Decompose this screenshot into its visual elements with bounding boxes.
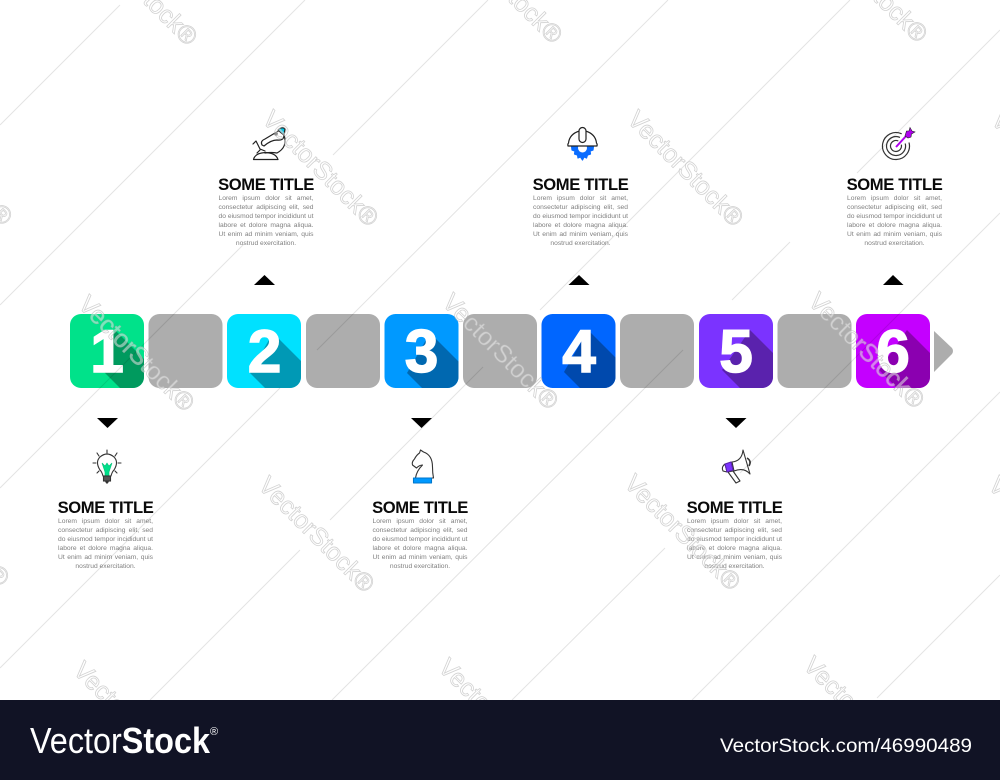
heading: SOME TITLE	[687, 498, 782, 516]
text block: nostrud exercitation.	[864, 240, 925, 247]
text block: Lorem ipsum dolor sit amet,	[218, 194, 314, 202]
text block: do eiusmod tempor incididunt ut	[218, 213, 314, 220]
text block: do eiusmod tempor incididunt ut	[372, 536, 468, 543]
text block: Ut enim ad minim veniam, quis	[847, 231, 942, 238]
text block: do eiusmod tempor incididunt ut	[58, 536, 153, 543]
text block: Lorem ipsum dolor sit amet,	[58, 518, 153, 524]
step 6	[856, 314, 930, 388]
text block: nostrud exercitation.	[390, 563, 450, 570]
watermark stamps: VectorStock®	[257, 105, 384, 233]
step 3: 3	[405, 318, 438, 385]
footer logo: VectorStock	[30, 720, 211, 761]
heading: SOME TITLE	[372, 498, 468, 516]
text block	[58, 518, 153, 570]
step 1: 1	[90, 318, 124, 385]
watermark stamps: VectorStock®	[73, 290, 200, 418]
footer id: VectorStock.com/46990489	[720, 736, 972, 757]
text block: nostrud exercitation.	[550, 240, 611, 247]
watermark stamps: VectorStock®	[619, 469, 746, 597]
text block	[847, 194, 942, 247]
timeline	[70, 314, 953, 388]
step 4	[542, 314, 616, 388]
step 2	[227, 314, 301, 388]
panel: step 1	[58, 450, 154, 570]
watermark stamps: VectorStock®	[253, 471, 380, 599]
text block: nostrud exercitation.	[236, 240, 296, 247]
panel: step 5	[687, 450, 782, 570]
step 5	[699, 314, 773, 388]
pointer arrows	[97, 275, 904, 428]
text block: Ut enim ad minim veniam, quis	[58, 554, 153, 561]
text block	[218, 194, 314, 247]
text block: labore et dolore magna aliqua.	[372, 545, 468, 552]
panel: step 3	[372, 449, 468, 570]
watermark stamps: VectorStock®	[622, 105, 749, 233]
text block: labore et dolore magna aliqua.	[533, 222, 628, 229]
text block: do eiusmod tempor incididunt ut	[687, 536, 782, 543]
text block: labore et dolore magna aliqua.	[58, 545, 153, 552]
panel: step 6	[847, 126, 942, 247]
text block: do eiusmod tempor incididunt ut	[533, 213, 628, 220]
text block: Ut enim ad minim veniam, quis	[533, 231, 628, 238]
heading: SOME TITLE	[847, 174, 942, 194]
text block: consectetur adipiscing elit, sed	[533, 204, 628, 211]
heading: SOME TITLE	[218, 174, 314, 194]
text block: nostrud exercitation.	[75, 563, 136, 570]
icon: megaphone	[722, 450, 751, 484]
text block: labore et dolore magna aliqua.	[218, 222, 314, 229]
text block: labore et dolore magna aliqua.	[847, 222, 942, 229]
icon: target and dart	[882, 126, 916, 160]
step 4: 4	[562, 318, 596, 385]
registered mark: ®	[210, 726, 218, 738]
text block: Lorem ipsum dolor sit amet,	[372, 518, 468, 524]
text block: consectetur adipiscing elit, sed	[847, 204, 942, 211]
step 2: 2	[248, 318, 281, 385]
text block: consectetur adipiscing elit, sed	[218, 204, 314, 211]
text block: Lorem ipsum dolor sit amet,	[847, 194, 942, 202]
text block: Ut enim ad minim veniam, quis	[372, 554, 468, 561]
text block: Lorem ipsum dolor sit amet,	[687, 518, 782, 524]
icon: helmet and gear	[567, 126, 598, 161]
watermark stamps: VectorStock®	[437, 288, 564, 416]
text block: do eiusmod tempor incididunt ut	[847, 213, 942, 220]
text block: Lorem ipsum dolor sit amet,	[533, 194, 628, 202]
connector blocks	[148, 314, 852, 388]
watermark stamps: VectorStock®	[803, 287, 930, 415]
panel: step 2	[218, 127, 314, 247]
heading: SOME TITLE	[58, 498, 153, 516]
text block: consectetur adipiscing elit, sed	[372, 527, 468, 534]
step 1	[70, 314, 144, 388]
step 3	[384, 314, 458, 388]
text block	[372, 518, 468, 570]
text block: labore et dolore magna aliqua.	[687, 545, 782, 552]
panel: step 4	[533, 126, 628, 247]
footer bar	[0, 700, 1000, 780]
end arrow	[934, 331, 953, 372]
text block	[687, 518, 782, 570]
icon: chess knight	[412, 449, 434, 484]
icon: microscope	[252, 127, 286, 160]
step 5: 5	[719, 318, 753, 385]
text block: Ut enim ad minim veniam, quis	[218, 231, 314, 238]
text block: Ut enim ad minim veniam, quis	[687, 554, 782, 561]
icon: light bulb	[92, 450, 122, 484]
step 6: 6	[876, 318, 910, 385]
text block: consectetur adipiscing elit, sed	[58, 527, 153, 534]
heading: SOME TITLE	[533, 174, 628, 194]
text block: consectetur adipiscing elit, sed	[687, 527, 782, 534]
text block: nostrud exercitation.	[704, 563, 765, 570]
text block	[533, 194, 628, 247]
